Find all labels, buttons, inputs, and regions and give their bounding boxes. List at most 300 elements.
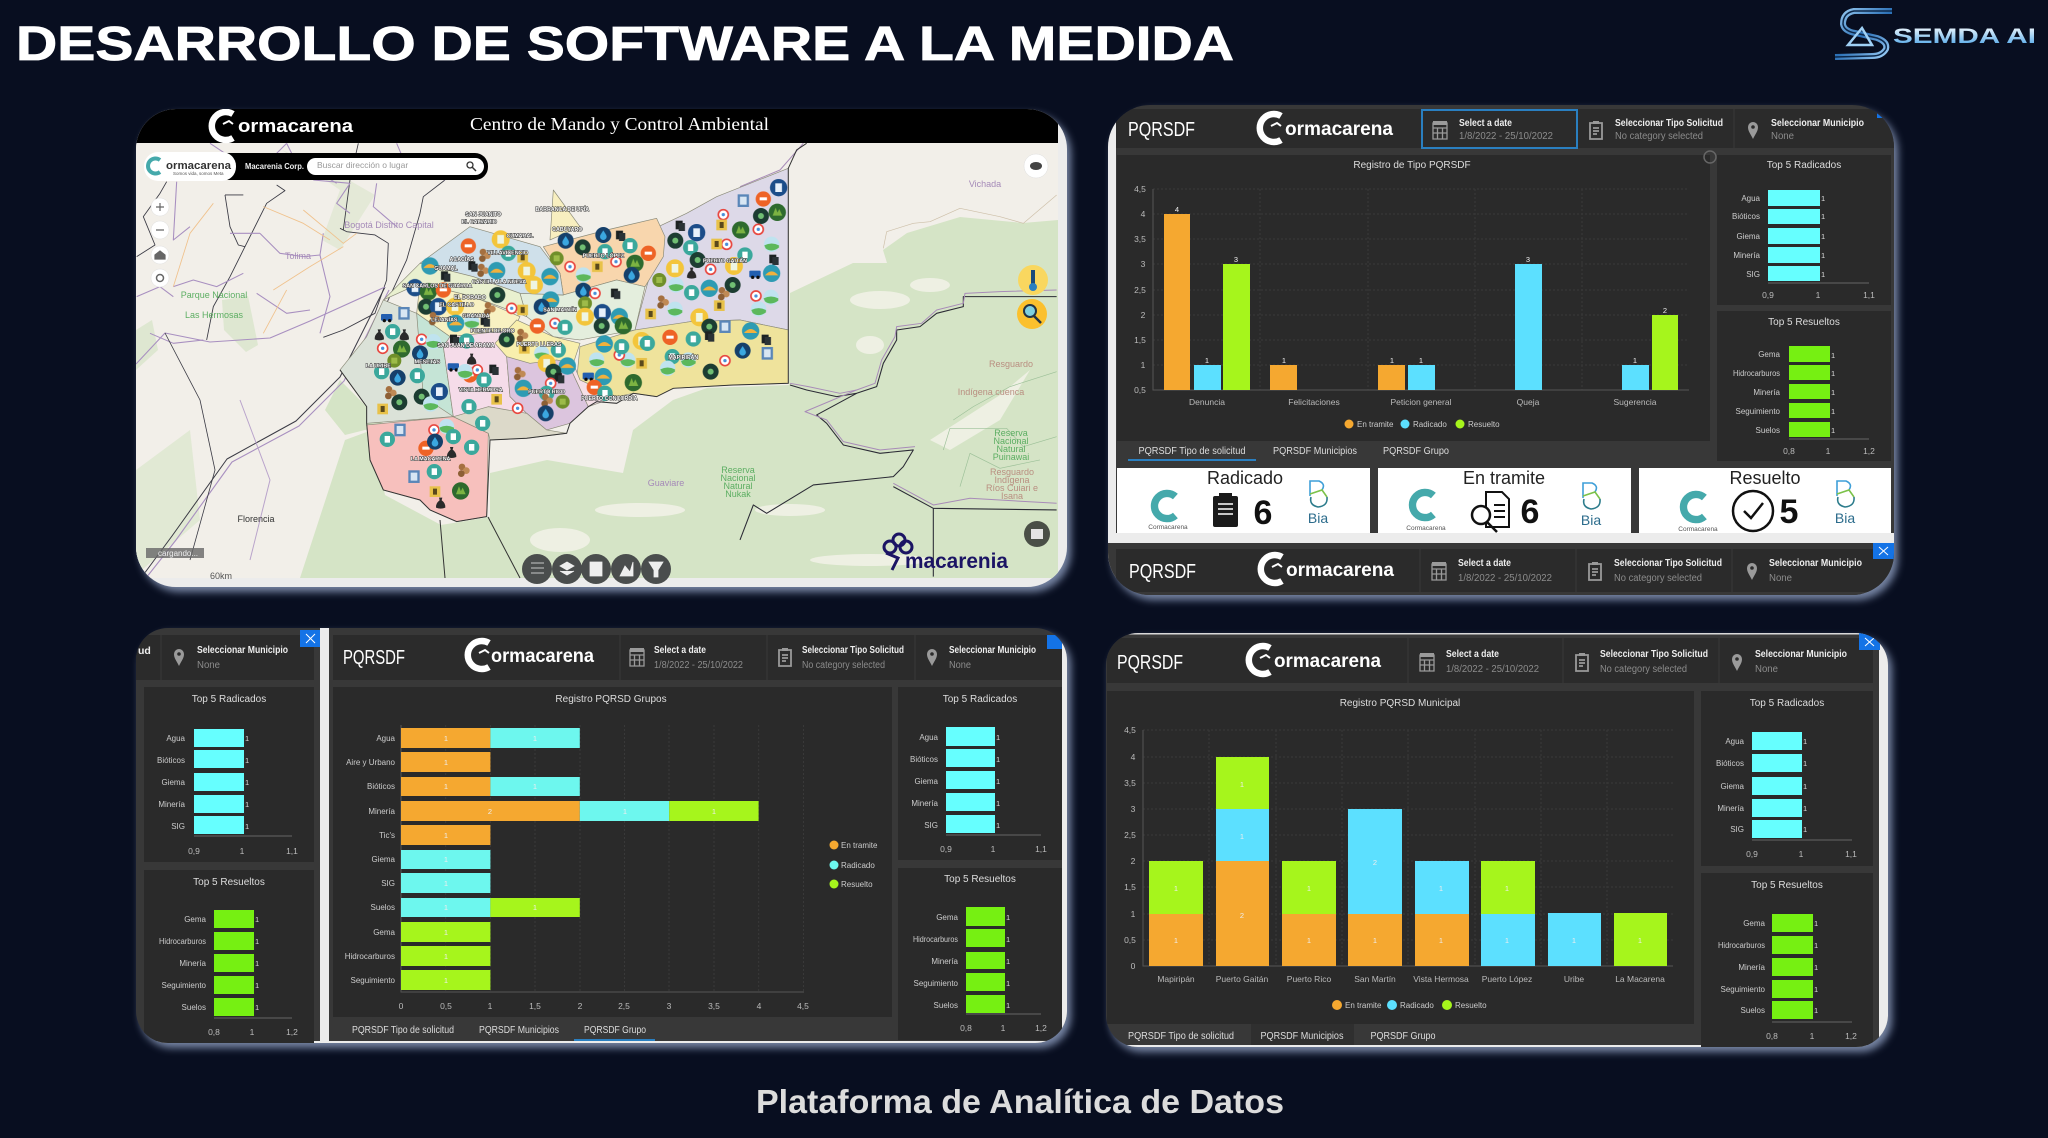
tabs: PQRSDF Grupo: [1383, 446, 1449, 457]
chart: Top 5 Radicados: 1: [1803, 804, 1807, 813]
bar chart: Registro PQRSD Municipal: 1: [1572, 936, 1576, 945]
map: tool buttons: [146, 154, 1050, 584]
chart: Top 5 Resueltos: 1,2: [1845, 1031, 1857, 1041]
card: Radicado: Bia: [1308, 510, 1328, 526]
chart: Top 5 Radicados right: Bióticos: [910, 755, 938, 764]
bar chart: Registro PQRSD Grupos: Suelos: [371, 903, 395, 912]
bar chart: Registro de Tipo PQRSDF: 3: [1526, 255, 1530, 264]
map: Meta department regions: [340, 168, 788, 522]
map green land: [136, 150, 1058, 578]
chart: Top 5 Resueltos left: Top 5 Resueltos: [193, 877, 265, 888]
left fragment header: Seleccionar Municipio: [197, 644, 288, 656]
map: place labels: Indígena cuenca: [958, 387, 1024, 397]
map: thematic markers: LEJANÍAS: [431, 316, 458, 324]
chart: Top 5 Resueltos: 1: [1831, 407, 1835, 416]
bar chart: Registro PQRSD Municipal: En tramite: [1345, 1001, 1382, 1010]
chart: Top 5 Radicados right: Minería: [911, 799, 939, 808]
map: thematic markers: EL CALVARIO: [462, 220, 497, 226]
bar chart: Registro PQRSD Grupos: Giema: [371, 855, 396, 864]
header bar: ormacarena: [1285, 119, 1393, 140]
map: place labels: Nacional: [993, 436, 1029, 446]
chart: Top 5 Radicados: 0,9: [1762, 290, 1774, 300]
bar chart: Registro PQRSD Municipal: 1: [1240, 832, 1244, 841]
panel: PQRSDF by request type: [1108, 105, 1894, 595]
bar chart: Registro de Tipo PQRSDF: Peticion general: [1391, 397, 1452, 407]
panel: municipal shadow: [1110, 638, 1892, 1052]
chart: Top 5 Resueltos left: Suelos: [182, 1003, 206, 1012]
bar chart: Registro PQRSD Municipal: 1: [1505, 884, 1509, 893]
map: place labels: Guaviare: [648, 478, 684, 488]
bar chart: Registro de Tipo PQRSDF: 4: [1141, 209, 1146, 219]
chart: Top 5 Radicados: 1: [1803, 737, 1807, 746]
map: place labels: Parque Nacional: [181, 290, 247, 300]
bar chart: Registro PQRSD Municipal: 1: [1307, 884, 1311, 893]
map: place labels: Resguardo: [989, 359, 1033, 369]
chart: Top 5 Resueltos left: Hidrocarburos: [159, 937, 206, 946]
bar chart: Registro de Tipo PQRSDF: Denuncia: [1189, 397, 1225, 407]
map: thematic markers: PUERTO GAITÁN: [703, 257, 747, 264]
chart: Top 5 Resueltos right: 1: [1006, 1001, 1010, 1010]
map: thematic markers: CASTILLA LA NUEVA: [472, 280, 526, 286]
chart: Top 5 Resueltos left: 1: [255, 1003, 259, 1012]
bar chart: Registro PQRSD Municipal: 1: [1373, 936, 1377, 945]
chart: Top 5 Resueltos left: 1: [255, 937, 259, 946]
map: header bar: [136, 109, 1058, 143]
lower header bar: Seleccionar Tipo Solicitud: [1614, 557, 1722, 569]
chart: Top 5 Resueltos left: 1: [255, 981, 259, 990]
bar chart: Registro de Tipo PQRSDF: Sugerencia: [1613, 397, 1657, 407]
bar chart: Registro de Tipo PQRSDF: Queja: [1517, 397, 1540, 407]
chart: Top 5 Resueltos right: Top 5 Resueltos: [944, 874, 1016, 885]
tabs: PQRSDF Tipo de solicitud: [352, 1025, 454, 1036]
tabs: PQRSDF Grupo: [1370, 1031, 1436, 1042]
chart: Top 5 Radicados left: 1: [245, 778, 249, 787]
chart: Top 5 Resueltos: 1: [1814, 941, 1818, 950]
header bar: Select a date: [1446, 648, 1499, 660]
lower header bar: None: [1769, 573, 1792, 584]
chart: Top 5 Resueltos right: 1: [1001, 1023, 1006, 1033]
map: place labels: Las Hermosas: [185, 310, 244, 320]
tabs: PQRSDF Municipios: [1260, 1031, 1344, 1042]
map: place labels: Nacional: [720, 473, 756, 483]
chart: Top 5 Resueltos: Seguimiento: [1721, 985, 1766, 994]
left fragment header: [136, 630, 320, 680]
chart: Top 5 Radicados: Bióticos: [1716, 759, 1744, 768]
chart: Top 5 Radicados: Top 5 Radicados: [1767, 160, 1841, 171]
map: thematic markers: PUERTO LÓPEZ: [583, 251, 625, 259]
chart: Top 5 Resueltos: 1: [1831, 388, 1835, 397]
chart: Top 5 Resueltos right: [898, 868, 1062, 1040]
bar chart: Registro PQRSD Grupos: 3,5: [708, 1001, 720, 1011]
header bar: None: [949, 660, 971, 671]
map: thematic markers: ACACÍAS: [450, 255, 474, 263]
bar chart: Registro PQRSD Grupos: Radicado: [841, 861, 875, 870]
bar chart: Registro de Tipo PQRSDF: 2: [1141, 310, 1146, 320]
bar chart: Registro PQRSD Grupos: 2: [488, 807, 492, 816]
map: thematic markers: VILLAVICENCIO: [487, 250, 528, 256]
chart: Top 5 Resueltos: 1: [1814, 919, 1818, 928]
bar chart: Registro PQRSD Grupos: Bióticos: [367, 782, 395, 791]
chart: Top 5 Radicados: Minería: [1733, 251, 1761, 260]
header bar: No category selected: [1615, 131, 1703, 142]
map: place labels: [181, 179, 1038, 581]
chart: Top 5 Resueltos: Top 5 Resueltos: [1751, 880, 1823, 891]
chart: Top 5 Resueltos: 0,8: [1783, 446, 1795, 456]
chart: Top 5 Radicados right: 0,9: [940, 844, 952, 854]
bar chart: Registro PQRSD Grupos: Aire y Urbano: [346, 758, 396, 767]
bar chart: Registro PQRSD Grupos: Hidrocarburos: [345, 952, 395, 961]
bar chart: Registro PQRSD Grupos: 1: [444, 903, 448, 912]
chart: Top 5 Resueltos: 1: [1831, 369, 1835, 378]
bar chart: Registro PQRSD Grupos: 1: [444, 831, 448, 840]
chart: Top 5 Resueltos left: Gema: [184, 915, 207, 924]
chart: Top 5 Radicados: 1: [1821, 270, 1825, 279]
chart: Top 5 Radicados: 1: [1821, 194, 1825, 203]
map: thematic markers: CUMARAL: [507, 234, 534, 240]
map: thematic markers: [366, 179, 787, 509]
chart: Top 5 Radicados: SIG: [1730, 825, 1744, 834]
bar chart: Registro de Tipo PQRSDF: 4: [1175, 205, 1179, 214]
bar chart: Registro PQRSD Municipal: 3,5: [1124, 778, 1136, 788]
bar chart: Registro PQRSD Municipal: 1: [1307, 936, 1311, 945]
bar chart: Registro PQRSD Grupos: 1: [444, 758, 448, 767]
tabs: [1128, 446, 1449, 461]
card: En tramite: Bia: [1581, 512, 1601, 528]
chart: Top 5 Radicados left: Agua: [166, 734, 186, 743]
map: place labels: Natural: [996, 444, 1026, 454]
chart: Top 5 Resueltos left: 0,8: [208, 1027, 220, 1037]
bar chart: Registro PQRSD Grupos: Minería: [368, 807, 396, 816]
bar chart: Registro PQRSD Municipal: 2,5: [1124, 830, 1136, 840]
map: thematic markers: SAN MARTÍN: [543, 306, 577, 314]
header bar: None: [1755, 664, 1778, 675]
card: Resuelto: Cormacarena: [1678, 526, 1718, 533]
tabs: PQRSDF Tipo de solicitud: [1128, 1031, 1234, 1042]
chart: Top 5 Radicados: 1,1: [1863, 290, 1875, 300]
header bar: PQRSDF: [1117, 652, 1183, 674]
chart: Top 5 Resueltos: Seguimiento: [1736, 407, 1781, 416]
chart: Top 5 Radicados left: [144, 687, 314, 862]
card: Radicado: 6: [1254, 494, 1272, 532]
bar chart: Registro de Tipo PQRSDF: 2: [1663, 306, 1667, 315]
chart: Top 5 Resueltos: 1: [1814, 963, 1818, 972]
chart: Top 5 Resueltos right: Minería: [931, 957, 959, 966]
chart: Top 5 Resueltos right: Gema: [936, 913, 959, 922]
chart: Top 5 Resueltos: Suelos: [1756, 426, 1780, 435]
chart: Top 5 Resueltos: 0,8: [1766, 1031, 1778, 1041]
card: En tramite: Cormacarena: [1406, 525, 1446, 532]
chart: Top 5 Radicados: 1: [1799, 849, 1804, 859]
bar chart: Registro PQRSD Municipal: 1: [1505, 936, 1509, 945]
chart: Top 5 Radicados right: 1: [996, 755, 1000, 764]
chart: Top 5 Radicados left: Giema: [161, 778, 186, 787]
chart: Top 5 Resueltos: 1: [1831, 426, 1835, 435]
map: thematic markers: LA MACARENA: [411, 457, 451, 463]
bar chart: Registro PQRSD Grupos: 3: [667, 1001, 672, 1011]
chart: Top 5 Resueltos right: Suelos: [934, 1001, 958, 1010]
chart: Top 5 Radicados: 1: [1803, 759, 1807, 768]
map eastern boundaries: [740, 143, 1057, 577]
chart: Top 5 Radicados right: SIG: [924, 821, 938, 830]
chart: Top 5 Radicados right: Giema: [914, 777, 939, 786]
bar chart: Registro PQRSD Municipal: 1: [1638, 936, 1642, 945]
header bar: Select a date: [1459, 117, 1512, 129]
map: place labels: Isana: [1001, 491, 1023, 501]
bar chart: Registro de Tipo PQRSDF: 3: [1234, 255, 1238, 264]
chart: Top 5 Radicados right: 1: [996, 799, 1000, 808]
chart: Top 5 Radicados: 0,9: [1746, 849, 1758, 859]
chart: Top 5 Radicados left: SIG: [171, 822, 185, 831]
chart: Top 5 Radicados: Minería: [1717, 804, 1745, 813]
bar chart: Registro de Tipo PQRSDF: 1: [1633, 356, 1637, 365]
chart: Top 5 Radicados left: Top 5 Radicados: [192, 694, 266, 705]
bar chart: Registro de Tipo PQRSDF: 2,5: [1134, 285, 1146, 295]
bar chart: Registro PQRSD Grupos: Agua: [376, 734, 396, 743]
map: thematic markers: LA URIBE: [366, 364, 391, 370]
map: place labels: Reserva: [994, 428, 1028, 438]
bar chart: Registro PQRSD Grupos: 1: [444, 855, 448, 864]
chart: Top 5 Resueltos: Gema: [1758, 350, 1781, 359]
map: search bar: ormacarena: [166, 160, 232, 172]
bar chart: Registro PQRSD Grupos: [333, 687, 892, 1017]
chart: Top 5 Radicados right: 1: [991, 844, 996, 854]
map: thematic markers: PUERTO RICO: [528, 389, 565, 395]
map: thematic markers: GUAMAL: [434, 266, 458, 272]
bar chart: Registro PQRSD Grupos: 1: [444, 782, 448, 791]
chart: Top 5 Radicados left: 1: [245, 822, 249, 831]
chart: Top 5 Resueltos: Top 5 Resueltos: [1768, 317, 1840, 328]
bar chart: Registro PQRSD Municipal: Vista Hermosa: [1413, 974, 1469, 984]
bar chart: Registro de Tipo PQRSDF: Radicado: [1413, 420, 1447, 429]
header bar: None: [1771, 131, 1794, 142]
bar chart: Registro PQRSD Municipal: Puerto López: [1482, 974, 1532, 984]
caption: Plataforma de Analítica de Datos: [756, 1083, 1284, 1120]
map: thematic markers: VISTA HERMOSA: [459, 388, 503, 394]
bar chart: Registro de Tipo PQRSDF: [1117, 151, 1716, 441]
left fragment header: ud: [138, 645, 151, 657]
chart: Top 5 Radicados: 1: [1821, 251, 1825, 260]
bar chart: Registro de Tipo PQRSDF: 4,5: [1134, 184, 1146, 194]
bar chart: Registro PQRSD Municipal: 4: [1131, 752, 1136, 762]
chart: Top 5 Radicados right: 1: [996, 821, 1000, 830]
chart: Top 5 Radicados: SIG: [1746, 270, 1760, 279]
bar chart: Registro de Tipo PQRSDF: Registro de Tipo PQRSDF: [1353, 160, 1471, 171]
bar chart: Registro PQRSD Grupos: 1: [444, 879, 448, 888]
bar chart: Registro PQRSD Grupos: Seguimiento: [351, 976, 396, 985]
map: thematic markers: BARRANCA DE UPÍA: [535, 205, 589, 213]
chart: Top 5 Radicados right: 1: [996, 777, 1000, 786]
bar chart: Registro PQRSD Grupos: 1: [444, 976, 448, 985]
chart: Top 5 Radicados: Top 5 Radicados: [1750, 698, 1824, 709]
map: tool buttons: cargando...: [158, 549, 198, 558]
chart: Top 5 Resueltos: Minería: [1738, 963, 1766, 972]
chart: Top 5 Resueltos right: Hidrocarburos: [913, 935, 958, 944]
bar chart: Registro de Tipo PQRSDF: En tramite: [1357, 420, 1394, 429]
map: Meta outline: [340, 143, 807, 522]
chart: Top 5 Radicados: Agua: [1725, 737, 1745, 746]
chart: Top 5 Resueltos: 1: [1814, 1006, 1818, 1015]
chart: Top 5 Radicados: 1: [1821, 232, 1825, 241]
chart: Top 5 Resueltos right: 1: [1006, 935, 1010, 944]
bar chart: Registro de Tipo PQRSDF: 1: [1141, 360, 1146, 370]
map: place labels: Florencia: [237, 514, 275, 524]
chart: Top 5 Resueltos right: 1: [1006, 979, 1010, 988]
header bar: ormacarena: [491, 646, 594, 667]
lower header bar: ormacarena: [1286, 560, 1394, 581]
chart: Top 5 Resueltos right: 1,2: [1035, 1023, 1047, 1033]
map: thematic markers: SAN CARLOS DE GUAROA: [403, 284, 472, 290]
bar chart: Registro PQRSD Municipal: 2: [1131, 856, 1136, 866]
chart: Top 5 Resueltos: Suelos: [1741, 1006, 1765, 1015]
map: search bar: Somos vida, somos Meta: [173, 171, 224, 176]
chart: Top 5 Radicados: [1701, 691, 1873, 866]
bar chart: Registro PQRSD Grupos: Resuelto: [841, 880, 873, 889]
bar chart: Registro PQRSD Municipal: 0: [1131, 961, 1136, 971]
header bar: 1/8/2022 - 25/10/2022: [1459, 131, 1553, 142]
bar chart: Registro PQRSD Municipal: San Martín: [1354, 974, 1396, 984]
bar chart: Registro PQRSD Municipal: 1: [1240, 780, 1244, 789]
card: Resuelto: 5: [1780, 493, 1798, 531]
header bar: PQRSDF: [1128, 119, 1195, 141]
bar chart: Registro PQRSD Grupos: SIG: [381, 879, 395, 888]
tabs: PQRSDF Municipios: [1273, 446, 1357, 457]
map: thematic markers: PUERTO LLERAS: [517, 342, 562, 348]
chart: Top 5 Radicados right: [898, 687, 1062, 860]
lower header bar: Select a date: [1458, 557, 1511, 569]
panel: PQRSDF type shadow: [1112, 110, 1898, 600]
bar chart: Registro PQRSD Municipal: 2: [1373, 858, 1377, 867]
chart: Top 5 Radicados: 1: [1803, 825, 1807, 834]
header bar: No category selected: [1600, 664, 1687, 675]
bar chart: Registro de Tipo PQRSDF: 1: [1282, 356, 1286, 365]
map: header bar: Centro de Mando y Control Ambiental: [470, 114, 769, 134]
chart: Top 5 Resueltos left: 1,2: [286, 1027, 298, 1037]
chart: Top 5 Radicados left: 1: [245, 756, 249, 765]
bar chart: Registro PQRSD Municipal: Uribe: [1564, 974, 1584, 984]
left fragment header: None: [197, 660, 220, 671]
chart: Top 5 Resueltos left: 1: [255, 959, 259, 968]
bar chart: Registro PQRSD Grupos: En tramite: [841, 841, 878, 850]
tabs: PQRSDF Grupo: [584, 1025, 646, 1036]
bar chart: Registro PQRSD Grupos: 2: [578, 1001, 583, 1011]
map: thematic markers: PUERTO CONCORDIA: [581, 396, 638, 402]
map: search bar: [144, 152, 488, 181]
header bar: [1116, 109, 1894, 148]
chart: Top 5 Radicados left: 1: [245, 734, 249, 743]
logo: Semda AI: SEMDA AI: [1893, 25, 2036, 48]
bar chart: Registro PQRSD Grupos: Registro PQRSD Grupos: [555, 694, 667, 705]
map: search bar: Buscar dirección o lugar: [317, 160, 408, 170]
map: thematic markers: MESETAS: [415, 360, 440, 366]
bar chart: Registro PQRSD Grupos: 1: [533, 903, 537, 912]
tabs: [352, 1025, 655, 1041]
chart: Top 5 Radicados: 1: [1816, 290, 1821, 300]
chart: Top 5 Resueltos: [1717, 311, 1891, 461]
chart: Top 5 Radicados: 1: [1803, 782, 1807, 791]
logo: Semda AI: [1835, 11, 2036, 57]
map: place labels: Tolima: [285, 251, 311, 261]
bar chart: Registro PQRSD Municipal: Resuelto: [1455, 1001, 1487, 1010]
bar chart: Registro de Tipo PQRSDF: 1: [1205, 356, 1209, 365]
bar chart: Registro PQRSD Grupos: 1: [444, 734, 448, 743]
chart: Top 5 Resueltos right: Seguimiento: [914, 979, 959, 988]
header bar: Seleccionar Municipio: [1771, 117, 1864, 129]
chart: Top 5 Resueltos left: 1: [255, 915, 259, 924]
card: En tramite: [1378, 468, 1631, 533]
map: place labels: Nukak: [725, 489, 751, 499]
map: place labels: 60km: [210, 571, 232, 581]
map pale clearings: [530, 278, 1030, 566]
chart: Top 5 Resueltos: Hidrocarburos: [1733, 369, 1780, 378]
header bar: Seleccionar Tipo Solicitud: [802, 644, 904, 656]
chart: Top 5 Radicados left: Minería: [158, 800, 186, 809]
bar chart: Registro PQRSD Grupos: 4,5: [797, 1001, 809, 1011]
lower header bar: PQRSDF: [1129, 561, 1196, 583]
chart: Top 5 Radicados left: 1: [240, 846, 245, 856]
map: place labels: Vichada: [969, 179, 1001, 189]
card: Resuelto: [1639, 468, 1891, 533]
chart: Top 5 Resueltos: Hidrocarburos: [1718, 941, 1765, 950]
chart: Top 5 Resueltos right: 1: [1006, 913, 1010, 922]
header bar: 1/8/2022 - 25/10/2022: [1446, 664, 1539, 675]
map: thematic markers: CABUYARO: [552, 227, 582, 233]
bar chart: Registro PQRSD Municipal: 2: [1240, 911, 1244, 920]
bar chart: Registro de Tipo PQRSDF: 0,5: [1134, 385, 1146, 395]
map: place labels: Ríos Cuiari e: [986, 483, 1038, 493]
tabs: PQRSDF Municipios: [479, 1025, 559, 1036]
bar chart: Registro de Tipo PQRSDF: Felicitaciones: [1288, 397, 1340, 407]
chart: Top 5 Radicados right: Top 5 Radicados: [943, 694, 1017, 705]
bar chart: Registro PQRSD Grupos: 1: [533, 782, 537, 791]
card: Resuelto: Resuelto: [1729, 468, 1801, 488]
chart: Top 5 Radicados left: 1: [245, 800, 249, 809]
bar chart: Registro de Tipo PQRSDF: 3,5: [1134, 234, 1146, 244]
bar chart: Registro PQRSD Grupos: 1: [444, 952, 448, 961]
header bar: Select a date: [654, 644, 706, 656]
bar chart: Registro de Tipo PQRSDF: 3: [1141, 259, 1146, 269]
bar chart: Registro PQRSD Municipal: La Macarena: [1615, 974, 1665, 984]
bar chart: Registro PQRSD Municipal: 1: [1439, 936, 1443, 945]
chart: Top 5 Resueltos: 1,2: [1863, 446, 1875, 456]
chart: Top 5 Radicados: 1,1: [1845, 849, 1857, 859]
map: thematic markers: MAPIRIPÁN: [668, 354, 698, 361]
chart: Top 5 Radicados: Bióticos: [1732, 212, 1760, 221]
header bar: Seleccionar Tipo Solicitud: [1615, 117, 1723, 129]
chart: Top 5 Radicados: Giema: [1720, 782, 1745, 791]
bar chart: Registro PQRSD Municipal: Registro PQRSD Municipal: [1340, 698, 1460, 709]
bar chart: Registro PQRSD Municipal: 0,5: [1124, 935, 1136, 945]
map: place labels: Bogotá Distrito Capital: [344, 220, 434, 230]
bar chart: Registro de Tipo PQRSDF: 1: [1419, 356, 1423, 365]
lower header bar: No category selected: [1614, 573, 1702, 584]
chart: Top 5 Resueltos: 1: [1831, 351, 1835, 360]
bar chart: Registro PQRSD Grupos: 1,5: [529, 1001, 541, 1011]
bar chart: Registro de Tipo PQRSDF: 1: [1390, 356, 1394, 365]
bar chart: Registro PQRSD Grupos: 4: [757, 1001, 762, 1011]
header bar: ormacarena: [1274, 651, 1381, 672]
chart: Top 5 Radicados left: Bióticos: [157, 756, 185, 765]
chart: Top 5 Resueltos left: Seguimiento: [162, 981, 207, 990]
bar chart: Registro PQRSD Grupos: 0,5: [440, 1001, 452, 1011]
tabs: PQRSDF Tipo de solicitud: [1138, 446, 1246, 457]
map: thematic markers: SAN JUANITO: [465, 212, 501, 218]
bar chart: Registro PQRSD Municipal: Puerto Rico: [1287, 974, 1331, 984]
header bar: No category selected: [802, 660, 885, 671]
chart: Top 5 Resueltos: Gema: [1743, 919, 1766, 928]
card: Radicado: [1117, 468, 1370, 533]
chart: Top 5 Radicados right: 1: [996, 733, 1000, 742]
chart: Top 5 Resueltos left: 1: [250, 1027, 255, 1037]
